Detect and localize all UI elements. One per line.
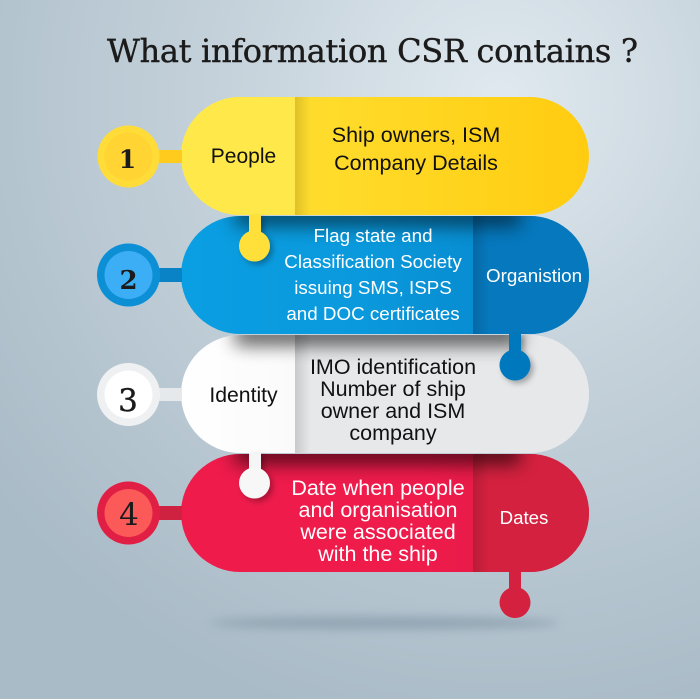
label: People: People (211, 145, 276, 168)
panel: dates (181, 444, 589, 572)
label: Dates: Dates (500, 507, 548, 528)
description: identity: owner and ISM (321, 399, 465, 423)
description: organisation: Flag state and (313, 225, 433, 246)
panel: identity (181, 325, 589, 453)
label: Organistion: Organistion (486, 265, 582, 286)
panel: people (181, 97, 589, 215)
description: dates: with the ship (317, 542, 438, 566)
connector pin: red (500, 572, 530, 618)
description: dates: and organisation (299, 498, 457, 522)
number badge 3: 3 (118, 383, 138, 419)
description: dates: were associated (299, 520, 456, 544)
number badge 1 (98, 126, 182, 188)
description: organisation: issuing SMS, ISPS (294, 277, 452, 298)
connector pin: blue (500, 334, 530, 380)
description: identity: IMO identification (310, 355, 476, 379)
title: What information CSR contains ? (107, 32, 638, 70)
description: identity: Number of ship (320, 377, 466, 401)
number badge 2: 2 (119, 266, 138, 296)
description: people: Company Details (334, 151, 498, 175)
connector pin: white (239, 453, 270, 498)
description: organisation: Classification Society (284, 251, 462, 272)
number badge 2 (97, 244, 182, 306)
number badge 4: 4 (119, 497, 139, 533)
ground shadow (210, 617, 560, 629)
description: organisation: and DOC certificates (286, 303, 460, 324)
label: Identity: Identity (209, 384, 278, 407)
description: dates: Date when people (291, 476, 465, 500)
number badge 3 (97, 363, 182, 426)
panel: organisation (181, 206, 589, 334)
connector pin: yellow (239, 215, 270, 262)
number badge 1: 1 (119, 145, 136, 174)
number badge 4 (97, 482, 182, 544)
description: identity: company (349, 421, 437, 445)
description: people: Ship owners, ISM (332, 123, 500, 147)
